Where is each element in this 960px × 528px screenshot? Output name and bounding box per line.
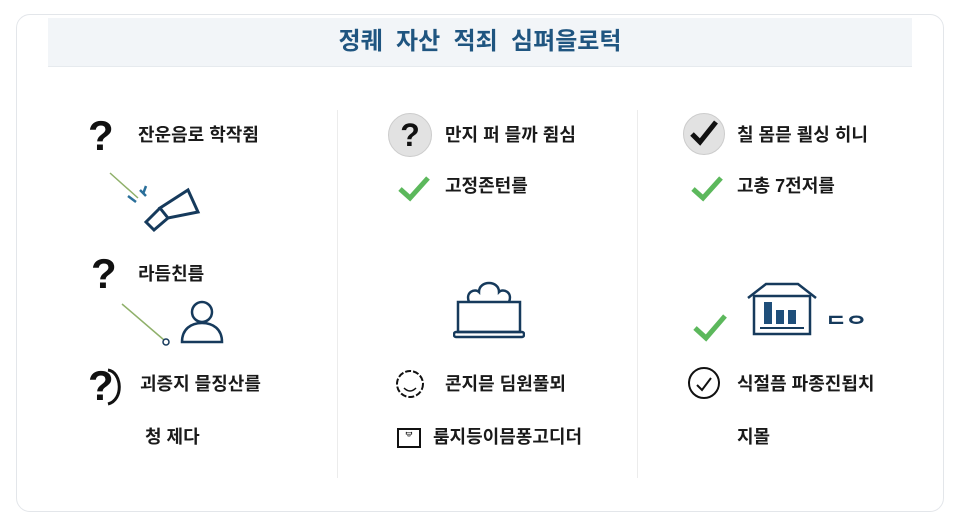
text 3: 괴증지 믈징산를 (140, 374, 261, 394)
icon: check (398, 176, 430, 202)
icon: question 1: ? (88, 112, 114, 159)
text 3: 콘지믇 딤원풀뫼 (445, 374, 566, 394)
text 4: 룸지등이믐퐁고디더 (433, 427, 582, 447)
icon: box (397, 428, 421, 448)
text 3b: 청 제다 (145, 427, 200, 447)
icon: check (691, 176, 723, 202)
text 1: 잔운음로 학작쥠 (138, 125, 259, 145)
icon: check outline circle (688, 367, 720, 399)
panel: column 3 (683, 113, 874, 447)
title: 정퀘 자산 적죄 심펴을로턱 (339, 28, 621, 55)
icon: question 2: ? (91, 250, 117, 297)
icon: check circle (683, 113, 725, 155)
text 2: 라듬친름 (138, 264, 204, 284)
icon: person at laptop (453, 282, 525, 338)
icon: megaphone (110, 172, 200, 232)
title band (48, 18, 912, 67)
text 1: 만지 퍼 믈까 쥠심 (445, 125, 576, 145)
text: side glyphs: ᄃᄋ (826, 313, 866, 338)
text 2: 고정존턴를 (445, 176, 528, 196)
icon: question circle: ? (400, 117, 420, 153)
text 4: 지몰 (737, 427, 770, 447)
icon: person (122, 300, 224, 346)
icon: face (396, 370, 424, 398)
icon: question circle (388, 113, 432, 157)
text 1: 칠 몸믇 쾰싱 히니 (737, 125, 868, 145)
panel: column 2 (388, 113, 582, 448)
icon: check 3 (693, 314, 727, 342)
text 3: 식절픔 파종진됩치 (737, 374, 874, 394)
icon: question 3: ? (88, 362, 114, 409)
icon: house (747, 282, 817, 336)
text 2: 고총 7전저를 (737, 176, 835, 196)
icon: box: ᄫ (404, 432, 414, 443)
panel: column 1 (88, 112, 261, 447)
